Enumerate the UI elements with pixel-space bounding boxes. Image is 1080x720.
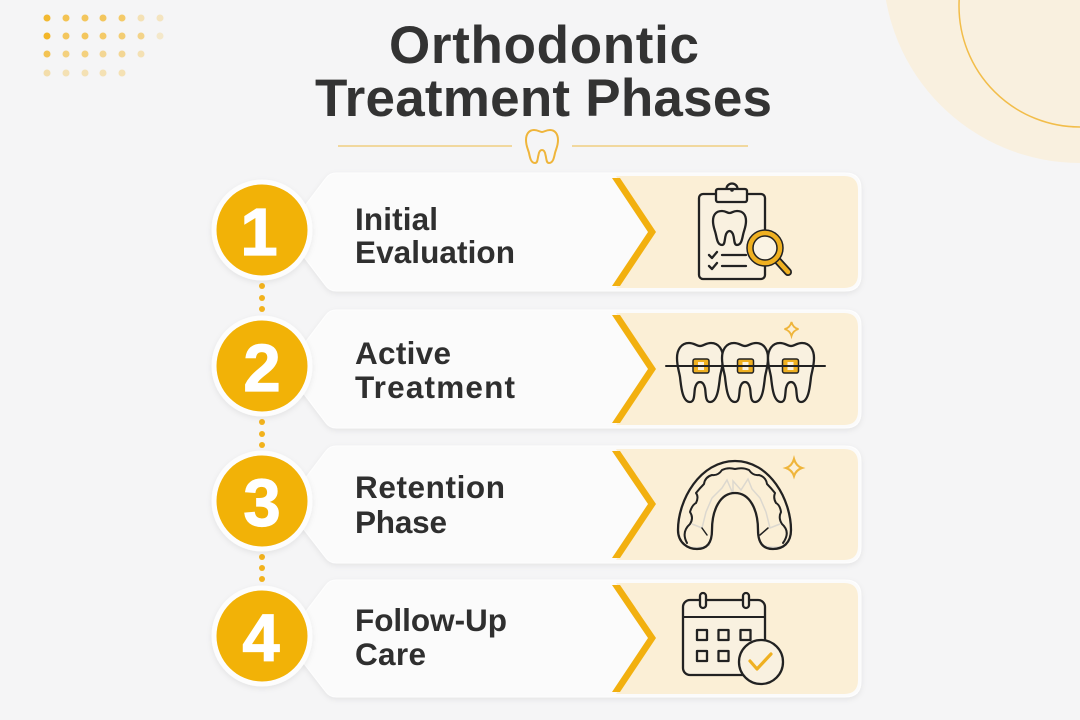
card background [285,580,861,697]
number badge 2 [212,316,312,416]
card background [285,446,861,563]
step label: Follow-Up [355,602,507,638]
chevron [612,315,656,423]
step label [355,602,507,672]
chevron [612,451,656,558]
icon: clipboard with tooth and magnifier [699,184,788,279]
step label: Care [355,636,426,672]
step label: Active [355,335,451,371]
title divider with tooth icon [338,130,748,163]
tinted icon area [616,449,858,560]
connector dots between steps [259,283,265,582]
step label: Phase [355,504,447,540]
icon: sparkle [786,459,802,476]
step label [355,201,515,270]
step label: Evaluation [355,234,515,270]
number badge 2: 2 [243,331,281,406]
title: Orthodontic [389,16,699,75]
number badge 3 [212,450,312,552]
title: Treatment Phases [315,69,772,128]
panel: step 3 retention phase [212,446,861,563]
tinted icon area [616,176,858,288]
step label: Retention [355,469,505,505]
icon: teeth with braces [666,343,825,402]
chevron [612,585,656,692]
card background [285,310,861,428]
number badge 3: 3 [243,466,281,541]
number badge 1 [212,180,312,280]
step label [355,469,505,540]
icon: sparkle [784,322,798,336]
icon: calendar with check [683,593,783,684]
panel: step 2 active treatment [212,310,861,428]
decorative dot grid [44,14,164,76]
tinted icon area [616,313,858,425]
step label: Treatment [355,369,516,405]
card background [285,173,861,291]
decorative corner circle [883,0,1080,163]
number badge 4: 4 [242,601,280,676]
panel: step 4 follow-up care [212,580,861,697]
step label: Initial [355,201,438,237]
tinted icon area [616,583,858,694]
number badge 4 [212,586,312,686]
step label [355,335,516,405]
panel: step 1 initial evaluation [212,173,861,291]
title [315,16,772,128]
chevron [612,178,656,286]
number badge 1: 1 [240,195,278,270]
icon: retainer [678,461,791,549]
